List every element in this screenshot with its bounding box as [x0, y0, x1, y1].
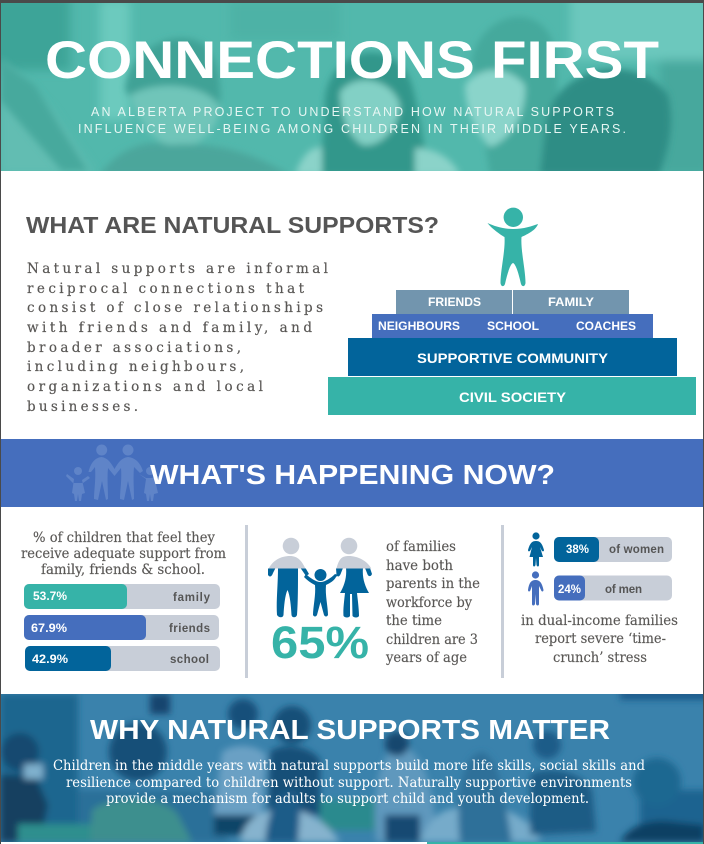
long-haired girl	[420, 808, 540, 842]
natural supports paragraph: Natural supports are informal	[27, 261, 328, 277]
icon: man	[528, 571, 544, 606]
caption	[21, 530, 226, 578]
right person	[540, 69, 671, 175]
banner: what's happening now	[0, 439, 704, 507]
natural supports paragraph: consist of close relationships	[27, 300, 323, 316]
subtitle: INFLUENCE WELL-BEING AMONG CHILDREN IN THEIR MIDDLE YEARS.	[78, 122, 626, 136]
bar: men	[554, 576, 672, 600]
description	[521, 613, 678, 666]
bar: school	[25, 646, 220, 671]
tier: friends and family: FRIENDS	[428, 297, 481, 309]
person with yellow top	[109, 723, 167, 781]
left person	[1, 733, 39, 771]
subtitle: AN ALBERTA PROJECT TO UNDERSTAND HOW NATURAL SUPPORTS	[91, 105, 614, 119]
front girl	[240, 809, 340, 842]
why natural supports body text: provide a mechanism for adults to support child and youth development.	[106, 791, 589, 807]
bar: family	[24, 584, 220, 609]
bar: friends	[24, 615, 219, 640]
pyramid diagram	[328, 290, 696, 415]
natural supports paragraph	[27, 261, 328, 415]
bar: family: 53.7%	[33, 591, 67, 603]
big number: 65%	[271, 617, 369, 668]
title: CONNECTIONS FIRST	[45, 31, 659, 90]
person in white	[228, 699, 258, 729]
bar: school: 42.9%	[32, 654, 68, 666]
man	[125, 38, 220, 110]
heading: what are natural supports: WHAT ARE NATURAL SUPPORTS?	[26, 212, 439, 238]
description: workforce by	[386, 595, 472, 611]
icon: woman	[528, 532, 544, 566]
header banner: photo with teal overlay	[0, 0, 704, 175]
panel: 65% of families	[268, 538, 480, 668]
boy	[633, 758, 681, 806]
why natural supports body text: resilience compared to children without support. Naturally supportive environments	[66, 775, 632, 791]
bar: friends: 67.9%	[31, 623, 67, 635]
description: report severe ‘time-	[535, 631, 666, 647]
tier: neighbours, school, coaches: NEIGHBOURS	[378, 321, 460, 333]
natural supports paragraph: organizations and local	[27, 379, 263, 395]
natural supports paragraph: with friends and family, and	[27, 320, 312, 336]
description: of families	[386, 539, 456, 555]
description: parents in the	[386, 576, 480, 592]
tier: civil society: CIVIL SOCIETY	[459, 390, 566, 405]
description	[385, 539, 480, 666]
description: years of age	[385, 650, 467, 666]
tier: civil society	[328, 377, 696, 415]
caption: % of children that feel they	[33, 530, 215, 546]
banner: what's happening now: WHAT'S HAPPENING NOW?	[150, 459, 555, 490]
bottom banner: photo with blue overlay	[0, 690, 704, 842]
caption: family, friends & school.	[41, 562, 205, 578]
person in dark jacket	[273, 706, 311, 744]
natural supports paragraph: reciprocal connections that	[27, 281, 305, 297]
description: have both	[386, 558, 453, 574]
bar: men: of men	[605, 584, 642, 596]
description: in dual-income families	[521, 613, 678, 629]
description: the time	[386, 613, 442, 629]
bar: friends: friends	[169, 623, 210, 635]
bar: women: 38%	[566, 544, 589, 556]
tier: neighbours, school, coaches: COACHES	[576, 321, 636, 333]
icon: family half filled	[268, 538, 372, 618]
subtitle	[78, 105, 626, 136]
description: crunch’ stress	[553, 650, 647, 666]
natural supports paragraph: businesses.	[27, 399, 138, 415]
tier: neighbours, school, coaches: SCHOOL	[487, 321, 539, 333]
heading: why natural supports matter: WHY NATURAL SUPPORTS MATTER	[90, 714, 610, 745]
caption: receive adequate support from	[21, 546, 226, 562]
tier: neighbours, school, coaches	[372, 314, 653, 338]
natural supports paragraph: broader associations,	[27, 340, 241, 356]
tier: supportive community	[348, 338, 677, 376]
bar: women: of women	[609, 544, 664, 556]
tier: friends and family	[396, 290, 629, 314]
bar: women	[554, 537, 672, 562]
centre person with hood	[320, 53, 428, 175]
natural supports paragraph: including neighbours,	[27, 359, 244, 375]
sporty girl	[533, 731, 561, 759]
why natural supports body text: Children in the middle years with natural supports build more life skills, social skills and	[53, 758, 645, 774]
tier: supportive community: SUPPORTIVE COMMUNITY	[417, 351, 608, 366]
man	[375, 745, 436, 842]
icon: child figure on pyramid	[488, 208, 538, 286]
description: children are 3	[386, 632, 478, 648]
panel: children's adequate support	[21, 530, 226, 671]
icon: faint family silhouette	[66, 444, 160, 501]
why natural supports body text	[53, 758, 645, 807]
bar: men: 24%	[558, 584, 581, 596]
panel: time-crunch stress	[521, 532, 678, 666]
woman	[472, 17, 558, 175]
tier: friends and family: FAMILY	[548, 297, 594, 309]
bar: family: family	[173, 592, 211, 604]
bar: school: school	[170, 654, 209, 666]
